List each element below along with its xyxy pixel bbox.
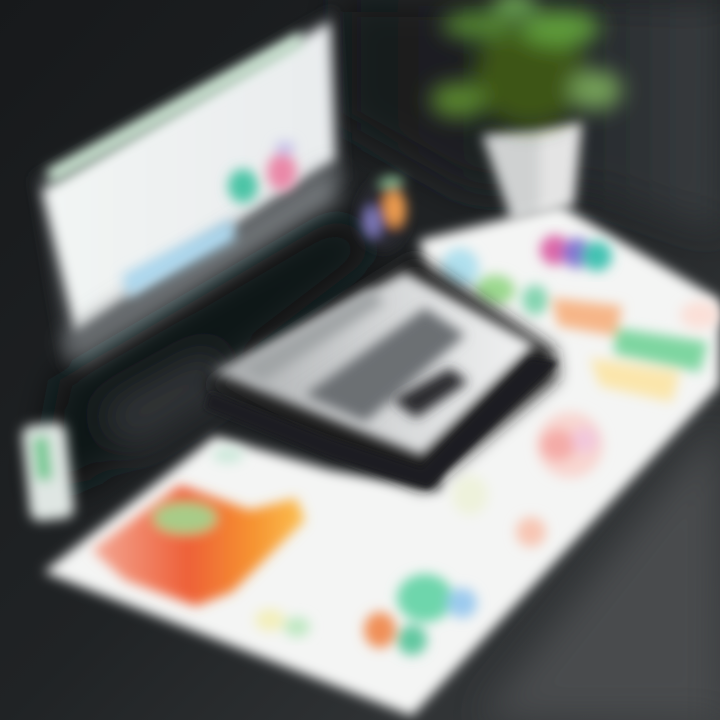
monitor chart: blue area: [122, 218, 236, 298]
bottom legend chip: [255, 609, 310, 637]
small circle charts: [452, 475, 546, 547]
paper sheet with charts: [44, 205, 720, 716]
plant leaves: [430, 0, 622, 127]
keyboard keys: [305, 308, 465, 422]
top sheet: coloured label bars: [441, 248, 720, 402]
plant pot: [482, 122, 582, 222]
monitor chart: green and pink blobs: [228, 141, 297, 203]
small colourful object: [359, 176, 407, 249]
pie chart: pink: [537, 412, 603, 478]
touchpad: [392, 368, 468, 418]
keyboard base: [205, 255, 558, 490]
monitor: [34, 10, 344, 378]
keyboard front edge: [205, 358, 558, 488]
monitor stand: [40, 215, 380, 490]
orange area chart: [92, 447, 305, 606]
phone device: [21, 422, 75, 522]
bottom cluster chart: [364, 574, 477, 655]
top sheet: donut chart: [540, 235, 612, 271]
